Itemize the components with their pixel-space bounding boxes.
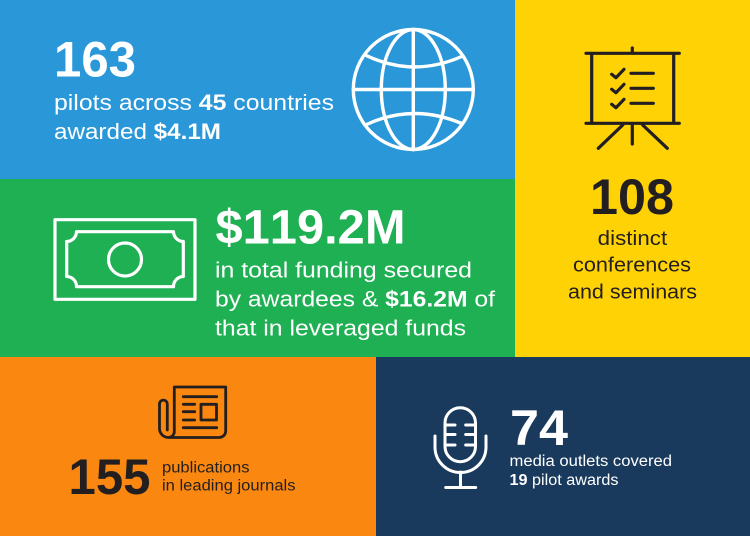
text: total funding: that in leveraged funds xyxy=(215,316,466,340)
text: distinct conferences and seminars xyxy=(568,227,697,304)
text: pilots across 45 countries awarded $4.1M: pilots across 45 countries xyxy=(54,90,334,115)
text: total funding: by awardees & $16.2M of xyxy=(215,287,496,312)
text: media outlets covered 19 pilot awards xyxy=(510,453,672,489)
panel: publications xyxy=(0,357,376,536)
text: media outlets covered 19 pilot awards: 19 pilot awards xyxy=(510,472,619,489)
stat: 163: 163 xyxy=(54,32,136,88)
panel: media xyxy=(376,357,750,536)
text: distinct conferences and seminars: and seminars xyxy=(568,280,697,304)
text: publications in leading journals xyxy=(162,460,296,495)
text: publications in leading journals: in leading journals xyxy=(162,478,296,495)
icon: banknote xyxy=(55,220,195,299)
icon: presentation board xyxy=(586,48,679,148)
text: distinct conferences and seminars: conferences xyxy=(573,254,691,277)
icon: newspaper xyxy=(159,387,226,438)
stat: $119.2M: $119.2M xyxy=(216,202,406,254)
stat: 155: 155 xyxy=(68,449,150,505)
text: pilots across 45 countries awarded $4.1M: awarded $4.1M xyxy=(54,119,221,144)
stat: 108: 108 xyxy=(590,169,674,225)
icon: globe xyxy=(353,30,473,150)
panel: pilots xyxy=(0,0,515,179)
text: total funding xyxy=(215,258,496,340)
icon: microphone xyxy=(435,408,486,488)
text: pilots across 45 countries awarded $4.1M xyxy=(54,90,334,144)
stat: 74: 74 xyxy=(510,400,568,456)
panel: funding xyxy=(0,179,515,357)
text: media outlets covered 19 pilot awards: media outlets covered xyxy=(510,453,672,470)
text: distinct conferences and seminars: distinct xyxy=(598,227,668,250)
panel: conferences xyxy=(515,0,750,357)
text: total funding: in total funding secured xyxy=(215,258,472,283)
text: publications in leading journals: publications xyxy=(162,460,250,476)
